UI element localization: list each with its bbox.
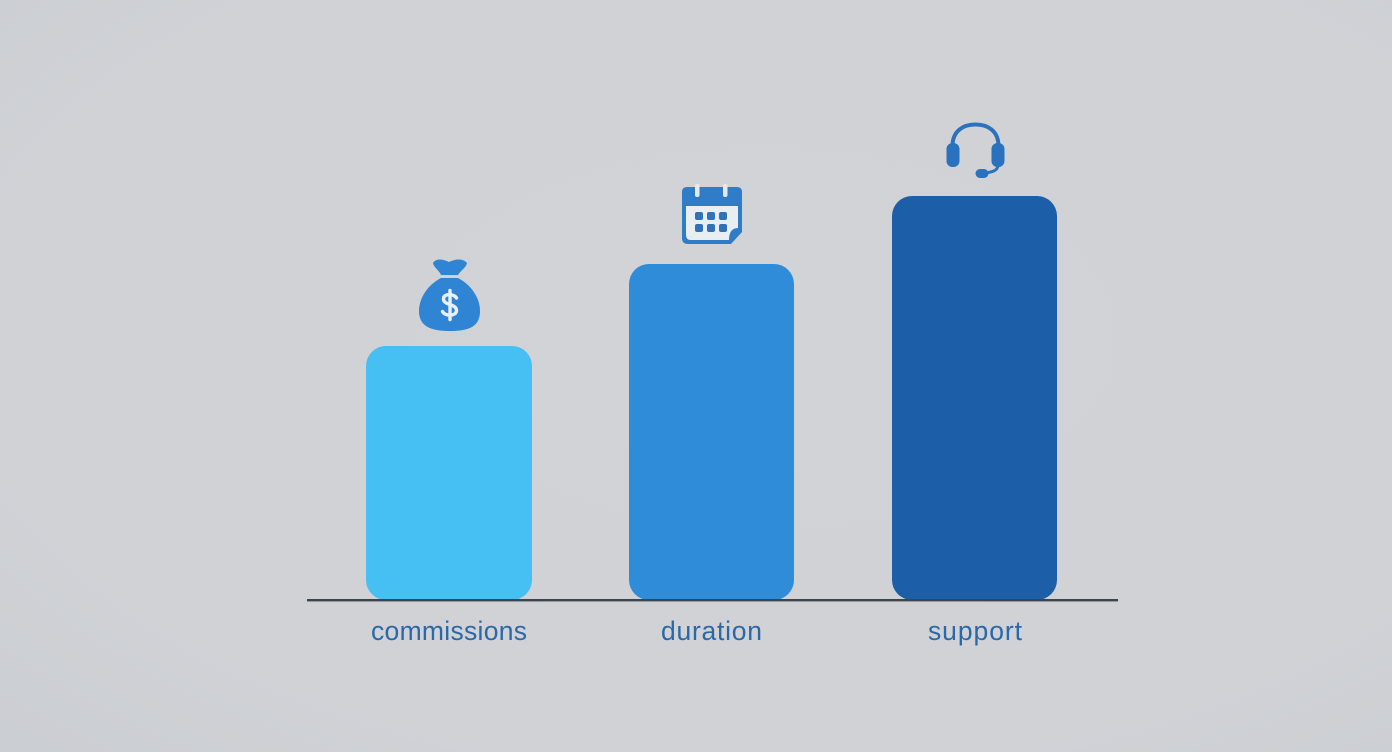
icon: headset bbox=[946, 124, 1004, 178]
label: duration: duration bbox=[661, 616, 762, 646]
icon: calendar bbox=[682, 184, 742, 244]
label: support: support bbox=[928, 616, 1023, 646]
bar: commissions bbox=[366, 346, 532, 600]
baseline axis bbox=[307, 599, 1118, 601]
label: commissions: commissions bbox=[371, 616, 527, 646]
bar: duration bbox=[629, 264, 794, 600]
icon glyph: dollar sign bbox=[442, 290, 456, 320]
icon: money bag bbox=[419, 260, 480, 331]
bar: support bbox=[892, 196, 1057, 600]
